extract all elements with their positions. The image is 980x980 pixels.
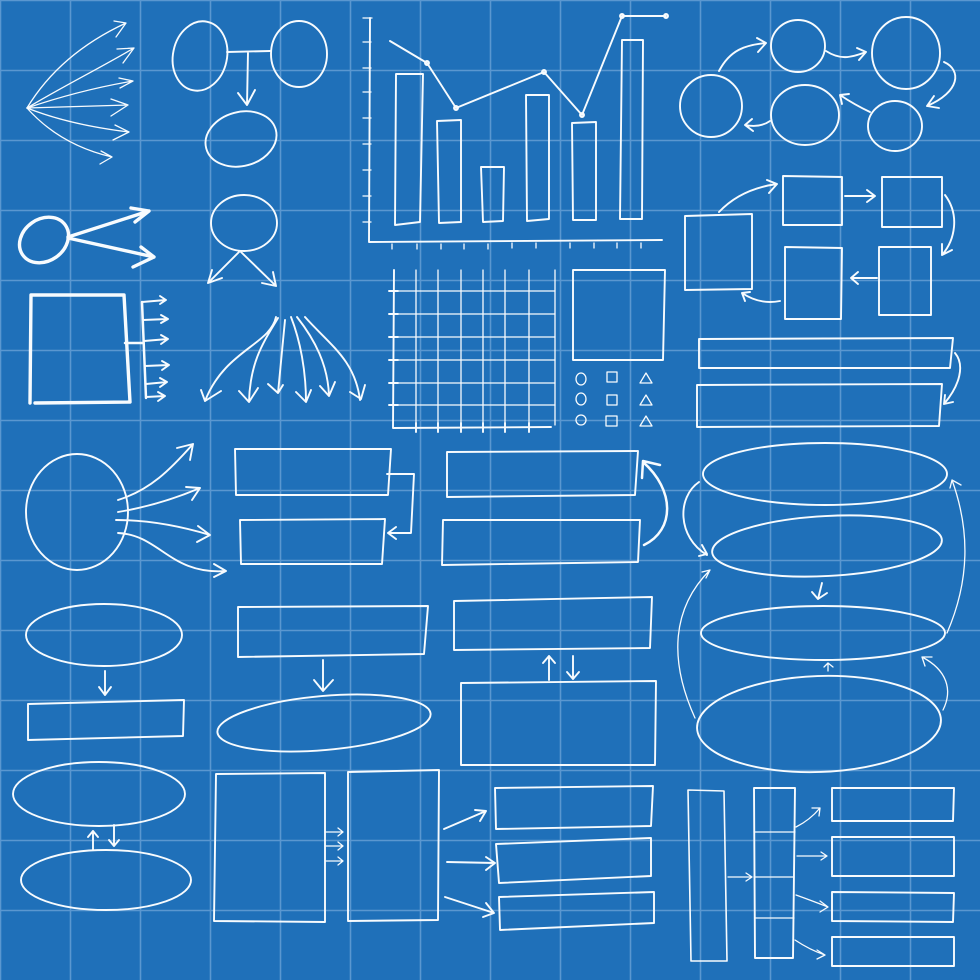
two tall rectangles to three bars (214, 770, 654, 930)
columns to four bars (688, 788, 954, 966)
ellipse above rectangle (26, 604, 184, 740)
two bars with thick curved arrow (442, 451, 667, 565)
downward spreading arrows (201, 317, 365, 402)
square flow diagram (685, 176, 954, 319)
two bars with elbow connector (235, 449, 414, 564)
cycle of five circles (680, 17, 955, 151)
square with six branch arrows (30, 295, 169, 403)
two long bars with curved arrow (697, 338, 960, 427)
two ellipses with opposing arrows (13, 762, 191, 910)
bar and line chart (363, 14, 668, 249)
three linked ellipses with arrow (166, 16, 327, 174)
fan of six arrows (27, 21, 134, 164)
two rectangles with opposing arrows (454, 597, 656, 765)
four stacked ellipses with arrows (678, 443, 965, 776)
small ellipse with two thick arrows (11, 208, 154, 272)
circle with two diverging arrows (208, 195, 277, 286)
circle with four arrows (26, 444, 226, 577)
table grid (389, 270, 555, 432)
rectangle above ellipse (215, 606, 433, 759)
square with symbol legend (573, 270, 665, 426)
